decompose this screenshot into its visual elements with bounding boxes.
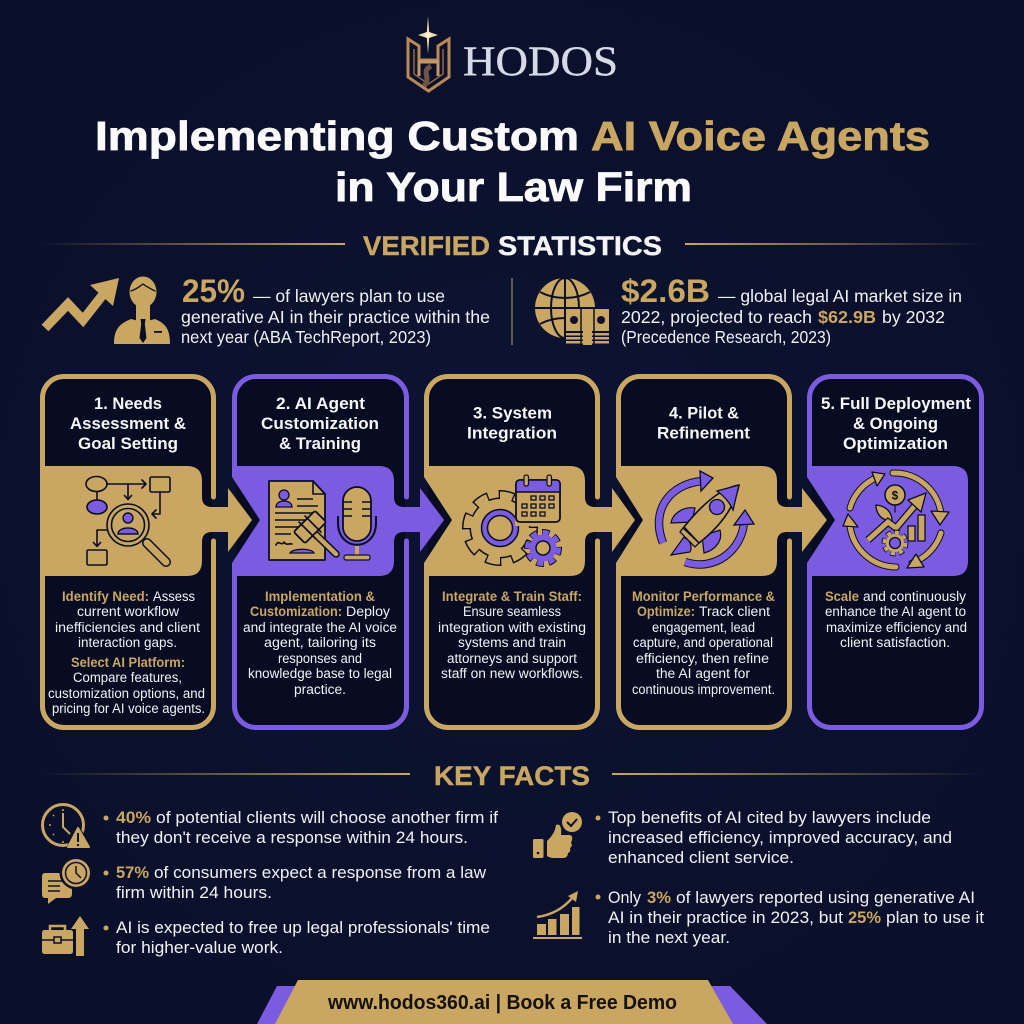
stat text (621, 273, 962, 347)
step title: Integration (467, 424, 557, 442)
stat text (181, 273, 490, 347)
fact text (608, 888, 984, 947)
stat text: 2022, projected to reach (621, 307, 812, 327)
stat text: next year (ABA TechReport, 2023) (181, 327, 431, 347)
icon: thumbs up with check (533, 812, 582, 858)
stat text: $2.6B (621, 273, 710, 309)
step description: engagement, lead (652, 620, 755, 635)
step title: Goal Setting (78, 434, 178, 453)
step description: Customization: (250, 604, 342, 619)
step title: 2. AI Agent (276, 394, 365, 413)
step description: responses and (278, 651, 362, 666)
step title: 3. System (473, 404, 552, 422)
key fact: 3% of lawyers (533, 888, 984, 947)
icon: contract, gavel and microphone (269, 481, 376, 560)
band (807, 466, 968, 576)
step title: Assessment & (70, 414, 186, 433)
stat text: — of lawyers plan to use (253, 286, 445, 306)
step title: 4. Pilot & (669, 404, 739, 422)
fact text: for higher-value work. (116, 938, 283, 957)
step description (48, 589, 205, 716)
icon: lawyer (114, 276, 170, 344)
step description: Select AI Platform: (71, 655, 185, 670)
fact text: Only (608, 888, 641, 907)
step description: Identify Need: (62, 589, 149, 604)
step description: Ensure seamless (463, 604, 561, 619)
step description: Monitor Performance & (632, 589, 775, 604)
step description: Optimize: (637, 604, 695, 619)
fact text: Top benefits of AI cited by lawyers include (608, 808, 931, 827)
stat text: by 2032 (882, 307, 945, 327)
icon: gears and calendar (468, 475, 562, 563)
step description: Integrate & Train Staff: (442, 589, 582, 604)
band with arrow (424, 466, 635, 576)
fact text: enhanced client service. (608, 848, 794, 867)
panel: step 1 (40, 376, 252, 728)
fact text: 57% (116, 863, 149, 882)
fact text: of lawyers reported using generative AI (676, 888, 975, 907)
fact text: in the next year. (608, 928, 730, 947)
step title (467, 404, 557, 442)
icon: rising arrow (45, 278, 119, 328)
step description: continuous improvement. (632, 682, 775, 697)
stat text: generative AI in their practice within the (181, 307, 490, 327)
icon: process magnifier (86, 476, 170, 565)
step title (821, 394, 971, 453)
wordmark: HODOS (463, 40, 618, 86)
step title: 1. Needs (94, 394, 162, 413)
icon: growth cycle: $ (892, 488, 899, 502)
step description (243, 589, 397, 697)
step description: enhance the AI agent to (825, 604, 966, 619)
fact text (116, 808, 498, 847)
heading: verified statistics (40, 231, 985, 261)
panel: step 5 (807, 376, 982, 728)
heading: verified statistics: VERIFIED (363, 231, 490, 261)
key fact: 40% of clients (42, 804, 498, 850)
step title: 5. Full Deployment (821, 394, 971, 413)
icon: clock with warning (42, 804, 93, 850)
icon: growth cycle (843, 472, 949, 568)
fact text (116, 863, 487, 902)
step description: Implementation & (265, 589, 375, 604)
stat text: $62.9B (818, 307, 876, 327)
title: AI Voice Agents (591, 113, 930, 159)
card frame (618, 376, 790, 728)
step description: pricing for AI voice agents. (52, 701, 205, 716)
key fact: free up time (42, 916, 490, 957)
card frame (810, 376, 982, 728)
fact text: firm within 24 hours. (116, 883, 272, 902)
band with arrow (616, 466, 827, 576)
panel: step 4 (616, 376, 827, 728)
fact text: 3% (647, 888, 671, 907)
step description: and continuously (863, 589, 966, 604)
logo: Hodos (408, 16, 618, 91)
fact text (116, 918, 490, 957)
fact text: of potential clients will choose another firm if (156, 808, 498, 827)
step description: maximize efficiency and (826, 620, 967, 635)
step title: Optimization (843, 434, 948, 453)
icon: rocket with cycle arrows (659, 471, 754, 564)
fact text: 25% (848, 908, 881, 927)
step title: Refinement (657, 424, 750, 442)
step description: Scale (825, 589, 859, 604)
stat text: — global legal AI market size in (718, 286, 962, 306)
step description: attorneys and support (447, 651, 577, 666)
step description: staff on new workflows. (441, 666, 583, 681)
card frame (426, 376, 598, 728)
footer banner (257, 980, 767, 1024)
step description: the AI agent for (656, 666, 751, 681)
step title: Customization (261, 414, 379, 433)
heading: key facts: KEY FACTS (434, 761, 590, 791)
heading: verified statistics: STATISTICS (498, 231, 662, 261)
title: Implementing Custom (95, 113, 579, 159)
title (95, 113, 930, 210)
panel: step 3 (424, 376, 635, 728)
step description: Track client (699, 604, 770, 619)
step description (632, 589, 775, 697)
key fact: top benefits (533, 808, 952, 867)
step description: efficiency, then refine (636, 651, 769, 666)
stat text: (Precedence Research, 2023) (621, 327, 831, 347)
step description: current workflow (77, 604, 179, 619)
step title (657, 404, 750, 442)
fact text: they don't receive a response within 24 hours. (116, 828, 468, 847)
icon: bar chart with arrow (533, 891, 582, 939)
step description: client satisfaction. (840, 635, 950, 650)
band with arrow (40, 466, 252, 576)
fact text (608, 808, 952, 867)
fact text: increased efficiency, improved accuracy, and (608, 828, 952, 847)
band with arrow (232, 466, 444, 576)
step description: and integrate the AI voice (243, 620, 397, 635)
step title (70, 394, 186, 453)
fact text: plan to use it (886, 908, 984, 927)
icon: briefcase with arrow (42, 916, 89, 956)
title: in Your Law Firm (335, 164, 692, 210)
fact text: AI is expected to free up legal professionals' time (116, 918, 490, 937)
step title: & Training (279, 434, 361, 453)
panel: step 2 (232, 376, 444, 728)
step description: systems and train (458, 635, 566, 650)
step description: agent, tailoring its (264, 635, 376, 650)
step description: customization options, and (48, 686, 205, 701)
icon: shield with star (408, 16, 449, 91)
fact text: of consumers expect a response from a law (154, 863, 487, 882)
card frame (234, 376, 406, 728)
stat: 25% of lawyers (45, 273, 490, 347)
call to action: www.hodos360.ai | Book a Free Demo (327, 992, 677, 1014)
step title: & Ongoing (853, 414, 938, 433)
step title (261, 394, 379, 453)
step description: practice. (294, 682, 346, 697)
step description (825, 589, 967, 650)
fact text: 40% (116, 808, 151, 827)
stat text: 25% (182, 273, 245, 309)
step description: integration with existing (438, 620, 586, 635)
fact text: AI in their practice in 2023, but (608, 908, 843, 927)
step description: Assess (153, 589, 195, 604)
step description: inefficiencies and client (55, 620, 200, 635)
step description (438, 589, 586, 681)
card frame (42, 376, 214, 728)
icon: chat with clock (42, 856, 92, 904)
stat: $2.6B market (535, 273, 962, 347)
key fact: 57% of consumers (42, 856, 487, 904)
step description: Deploy (346, 604, 390, 619)
step description: knowledge base to legal (248, 666, 392, 681)
step description: capture, and operational (633, 635, 773, 650)
step description: Compare features, (73, 670, 182, 685)
icon: globe with money (535, 278, 611, 345)
step description: interaction gaps. (78, 635, 177, 650)
